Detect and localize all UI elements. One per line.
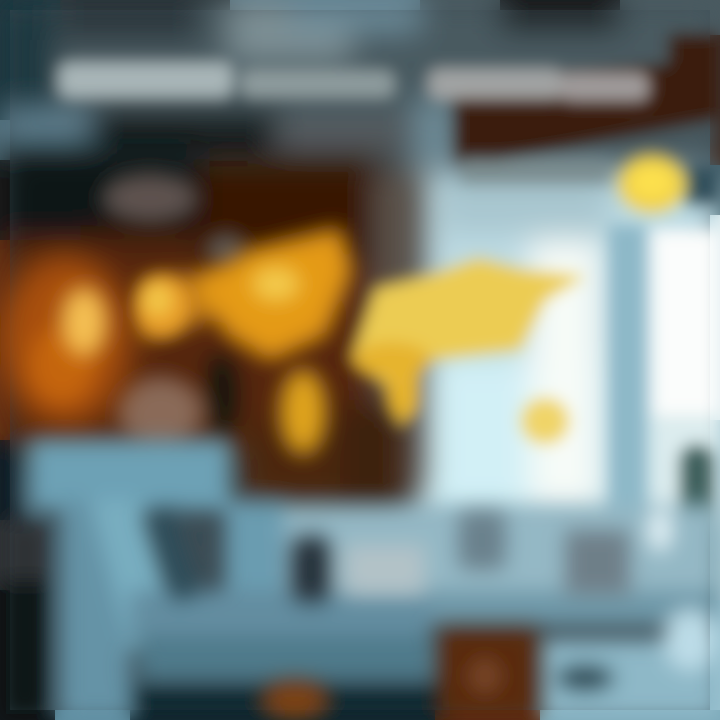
orange glows — [0, 228, 352, 454]
window and frame — [608, 225, 720, 525]
right wall — [410, 165, 720, 530]
yellow world map — [350, 258, 585, 444]
desk and sofa — [0, 440, 720, 720]
plant — [680, 445, 714, 610]
grey smudges on dark wall — [102, 174, 246, 446]
desk objects — [147, 508, 672, 720]
title, illegible in the reference — [58, 62, 650, 102]
dark brown ceiling beam — [455, 35, 720, 205]
left dark wall — [0, 150, 423, 510]
ceiling background — [0, 0, 720, 170]
pendant lamp — [618, 155, 686, 213]
